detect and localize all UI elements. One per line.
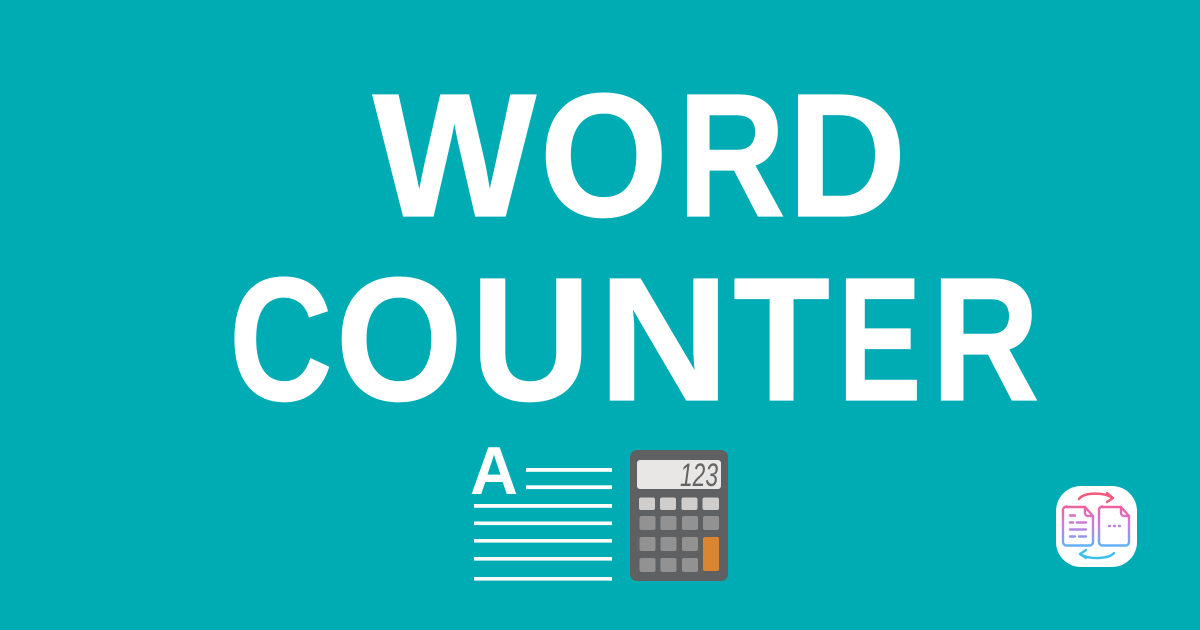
icon: text document: A (470, 433, 518, 509)
title: COUNTER: R (931, 241, 1039, 438)
icon: text document (470, 433, 612, 581)
calculator digits: 123 (680, 457, 718, 493)
icon: calculator (630, 450, 728, 581)
right document (1099, 506, 1129, 546)
title: COUNTER: N (598, 241, 729, 437)
title: COUNTER (229, 241, 1039, 438)
title: COUNTER: C (229, 242, 333, 438)
arrow: top (1079, 493, 1113, 502)
title: COUNTER: U (471, 242, 591, 438)
title: COUNTER: T (733, 241, 830, 438)
title: WORD: W (373, 58, 536, 254)
left document (1063, 506, 1093, 546)
calculator display (637, 460, 721, 489)
title: WORD (373, 57, 906, 254)
logo: document conversion app icon (1056, 486, 1137, 567)
title: WORD: R (678, 57, 786, 254)
title: WORD: D (788, 58, 906, 254)
title: COUNTER: O (336, 242, 463, 438)
calculator keys (639, 498, 719, 572)
title: WORD: O (540, 57, 668, 254)
title: COUNTER: E (838, 242, 921, 438)
arrow: bottom (1080, 550, 1114, 558)
